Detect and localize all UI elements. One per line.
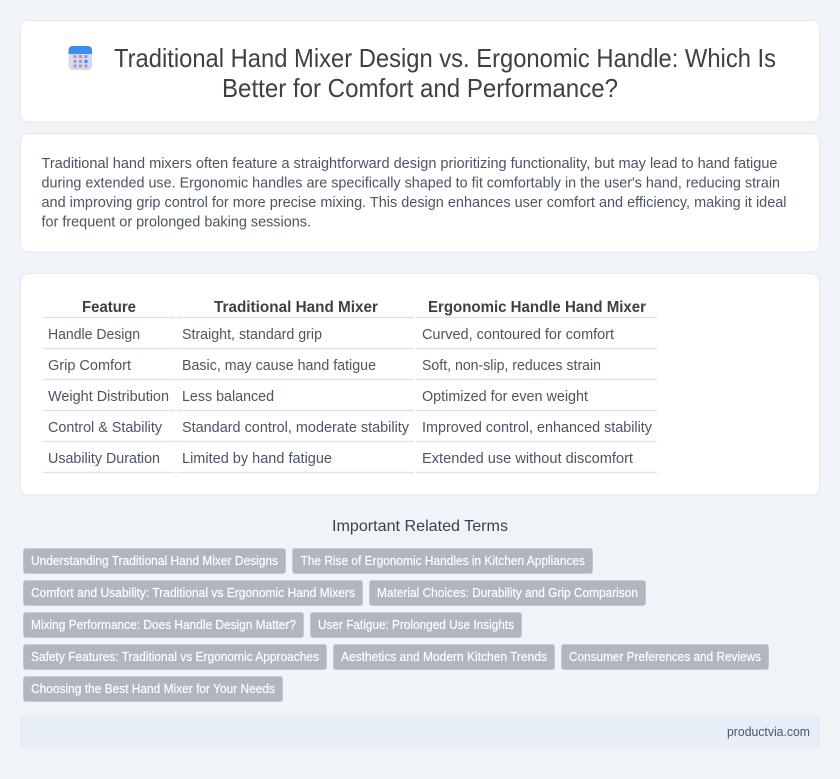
table row: handle design [43, 327, 657, 348]
table row: grip comfort: Soft, non-slip, reduces strain [422, 358, 601, 374]
table row: control and stability [43, 420, 657, 442]
tag: choosing the best mixer [24, 676, 282, 702]
title [114, 45, 776, 103]
table row: usability duration [43, 451, 657, 472]
table row: handle design: Straight, standard grip [182, 327, 322, 343]
tag: user fatigue: User Fatigue: Prolonged Use Insights [318, 617, 514, 632]
title: Traditional Hand Mixer Design vs. Ergonomic Handle: Which Is [114, 45, 776, 73]
footer bar: productvia.com [727, 724, 810, 739]
table row: usability duration: Limited by hand fatigue [182, 451, 332, 467]
tag: user fatigue [310, 612, 522, 638]
table row: handle design: Curved, contoured for comfort [422, 327, 614, 343]
panel: title header [20, 20, 820, 122]
intro text: and improving grip control for more precise mixing. This design enhances user comfort and efficiency, making it ideal [42, 195, 786, 211]
table header row: Traditional Hand Mixer [214, 299, 378, 316]
table row: weight distribution: Weight Distribution [48, 389, 169, 405]
table row: control and stability: Standard control, moderate stability [182, 420, 410, 436]
table row: grip comfort [43, 358, 657, 380]
tag: choosing the best mixer: Choosing the Best Hand Mixer for Your Needs [31, 681, 275, 696]
table header row: Feature [82, 299, 136, 316]
footer bar [20, 715, 820, 749]
intro text: for frequent or prolonged baking sessions. [42, 214, 311, 230]
tag: aesthetics: Aesthetics and Modern Kitchen Trends [341, 649, 547, 664]
tag: consumer preferences [562, 644, 768, 670]
table row: weight distribution: Less balanced [182, 389, 274, 405]
tag: material choices: Material Choices: Durability and Grip Comparison [377, 585, 638, 600]
tag: understanding designs [24, 548, 286, 574]
table row: usability duration: Usability Duration [48, 451, 160, 467]
table header row [43, 299, 657, 318]
tag: comfort and usability: Comfort and Usability: Traditional vs Ergonomic Hand Mixers [31, 585, 355, 600]
table row: control and stability: Improved control, enhanced stability [422, 420, 653, 436]
icon: calendar [68, 46, 92, 70]
tag: safety features [24, 644, 326, 670]
related terms heading: Important Related Terms [332, 518, 508, 535]
tag: mixing performance: Mixing Performance: Does Handle Design Matter? [31, 617, 296, 632]
table row: control and stability: Control & Stability [48, 420, 163, 436]
table row: usability duration: Extended use without discomfort [422, 451, 633, 467]
tag: mixing performance [24, 612, 304, 638]
tag: aesthetics [334, 644, 554, 670]
tag: rise of ergonomic handles: The Rise of Ergonomic Handles in Kitchen Appliances [300, 553, 585, 568]
table row: grip comfort: Basic, may cause hand fatigue [182, 358, 376, 374]
table header row: Ergonomic Handle Hand Mixer [428, 299, 646, 316]
intro text: during extended use. Ergonomic handles are specifically shaped to fit comfortably in the user's hand, reducing strain [42, 176, 780, 192]
tag: rise of ergonomic handles [292, 548, 592, 574]
panel: intro paragraph [20, 134, 820, 252]
table row: handle design: Handle Design [48, 327, 140, 343]
panel: comparison table [20, 274, 820, 495]
table row: grip comfort: Grip Comfort [48, 358, 131, 374]
related term tags [24, 548, 768, 702]
table row: weight distribution [43, 389, 657, 410]
table row: weight distribution: Optimized for even weight [422, 389, 588, 405]
tag: comfort and usability [24, 580, 362, 606]
tag: consumer preferences: Consumer Preferences and Reviews [569, 649, 761, 664]
title: Better for Comfort and Performance? [222, 75, 618, 103]
tag: material choices [370, 580, 646, 606]
tag: safety features: Safety Features: Traditional vs Ergonomic Approaches [31, 649, 319, 664]
intro text: Traditional hand mixers often feature a straightforward design prioritizing functionality, but may lead to hand fatigue [42, 156, 778, 172]
tag: understanding designs: Understanding Traditional Hand Mixer Designs [31, 553, 278, 568]
intro text [42, 156, 786, 230]
